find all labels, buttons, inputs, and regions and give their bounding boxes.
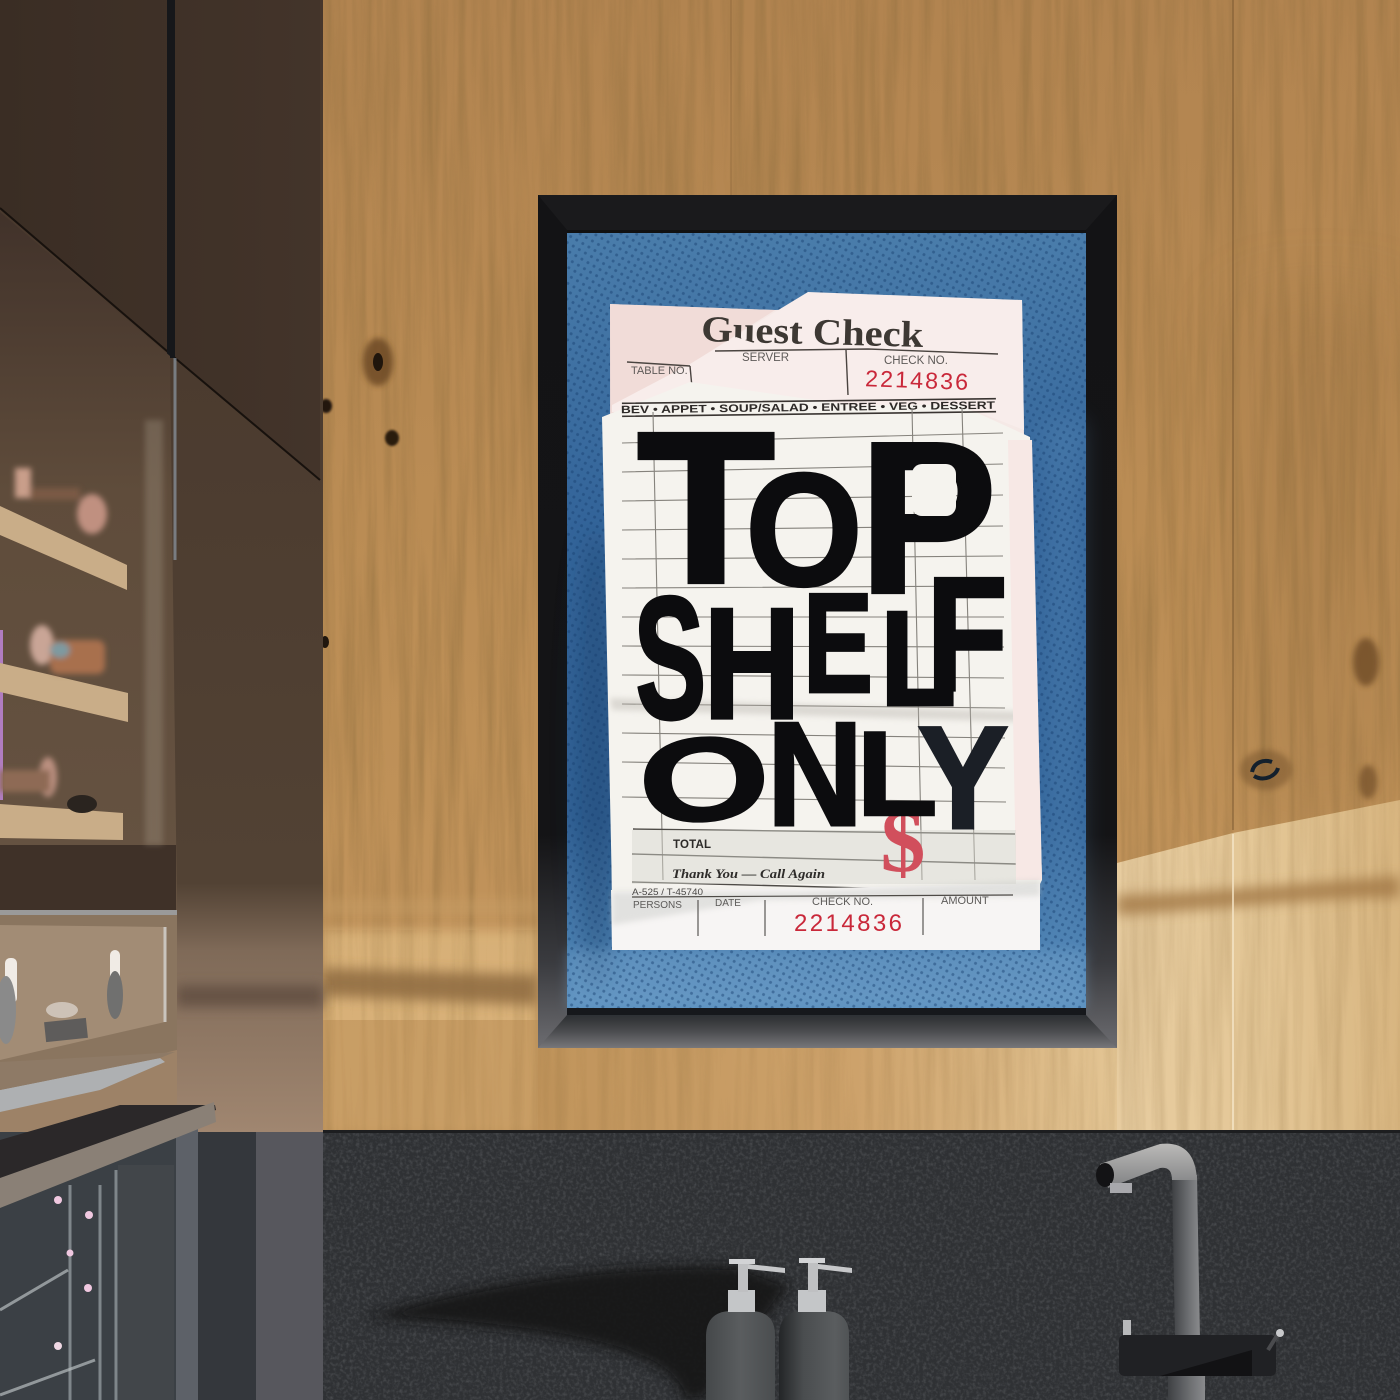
red dollar sign: $ bbox=[880, 792, 926, 891]
front sheet bbox=[602, 382, 1042, 892]
body reflection bbox=[1160, 1350, 1252, 1376]
left bottle bbox=[706, 1259, 785, 1400]
mixer body bbox=[1119, 1335, 1276, 1376]
lever tip bbox=[1276, 1329, 1284, 1337]
spout end bbox=[1096, 1163, 1114, 1187]
headline: ONLY: L bbox=[856, 706, 938, 841]
bottle shadow bbox=[365, 1265, 790, 1400]
bottom stub: DATE bbox=[715, 898, 741, 909]
bottom stub: 2214836 bbox=[794, 910, 902, 937]
lever pin bbox=[1123, 1320, 1131, 1336]
vertical gap bbox=[167, 0, 175, 358]
check header labels bbox=[631, 352, 948, 377]
headline: SHELF bbox=[631, 545, 1008, 757]
headline: SHELF: E bbox=[803, 565, 873, 723]
headline: SHELF: L bbox=[880, 583, 956, 734]
kitchen faucet bbox=[1096, 1144, 1284, 1400]
total and thank-you lines: TOTAL bbox=[673, 839, 711, 851]
oven lower wood front bbox=[0, 1050, 177, 1132]
glass light streak bbox=[174, 358, 176, 560]
oven door handle bbox=[0, 1052, 216, 1208]
bottom stub: A-525 / T-45740 bbox=[632, 887, 703, 898]
bottom stub: PERSONS bbox=[633, 900, 682, 911]
total and thank-you lines: Thank You — Call Again bbox=[672, 866, 825, 881]
guest check: folded flap bbox=[612, 292, 1024, 430]
spout bbox=[1100, 1144, 1197, 1188]
check header labels: CHECK NO. bbox=[884, 355, 948, 367]
headline: ONLY: Y bbox=[918, 696, 1008, 859]
side lever bbox=[1268, 1334, 1278, 1350]
category strip bbox=[621, 399, 996, 416]
check header labels: TABLE NO. bbox=[631, 365, 688, 377]
lower left oven glass bbox=[0, 1125, 323, 1400]
check header rule lines bbox=[627, 349, 998, 398]
right bottle bbox=[779, 1258, 852, 1400]
paper fold shading bbox=[610, 440, 1042, 884]
cabinet seams bbox=[0, 208, 320, 480]
bottom stub: AMOUNT bbox=[941, 895, 989, 907]
headline: TOP: O bbox=[746, 441, 862, 619]
headline: SHELF: H bbox=[703, 576, 801, 752]
bottles bbox=[0, 468, 107, 797]
sunlight patches on wood bbox=[320, 800, 1400, 1132]
P counter bbox=[912, 464, 956, 516]
check header labels: SERVER bbox=[742, 352, 789, 364]
guest check heading: Guest Check bbox=[701, 309, 924, 356]
poster background bbox=[567, 230, 1086, 1015]
top rail bbox=[538, 195, 1117, 230]
headline: ONLY: O bbox=[634, 709, 774, 850]
ruled lines on check bbox=[622, 408, 1006, 880]
flap fold covering heading bbox=[694, 337, 760, 362]
guest check: back sheet bbox=[610, 300, 1040, 950]
bottom stub: CHECK NO. bbox=[812, 896, 873, 908]
wood knots bbox=[320, 338, 1379, 799]
headline: ONLY: N bbox=[767, 691, 863, 857]
headline: TOP: P bbox=[860, 398, 996, 638]
shelves bbox=[0, 506, 127, 590]
headline: TOP: T bbox=[637, 388, 775, 628]
wood wall bbox=[320, 0, 1400, 1132]
upper cabinet doors bbox=[0, 0, 320, 480]
oven control panel bbox=[0, 910, 177, 1092]
red serial number top: 2214836 bbox=[865, 365, 971, 395]
aerator bbox=[1110, 1183, 1132, 1193]
bottom rail bbox=[538, 1015, 1117, 1048]
wine cabinet glass bbox=[0, 212, 177, 910]
picture frame bbox=[538, 195, 1117, 1048]
category strip: BEV • APPET • SOUP/SALAD • ENTREE • VEG • DESSERT bbox=[621, 400, 996, 416]
frame outer bbox=[538, 195, 1117, 1048]
total and thank-you lines bbox=[672, 839, 825, 881]
headline: SHELF: F bbox=[926, 545, 1008, 725]
stem bbox=[1172, 1175, 1200, 1340]
headline: TOP bbox=[637, 388, 996, 638]
stone backsplash bbox=[323, 1130, 1400, 1400]
left kitchen cabinetry bbox=[0, 0, 323, 1132]
headline: ONLY bbox=[634, 691, 1008, 859]
soap dispenser bottles bbox=[706, 1258, 852, 1400]
headline: SHELF: S bbox=[631, 560, 709, 757]
bottom stub bbox=[612, 880, 1040, 950]
